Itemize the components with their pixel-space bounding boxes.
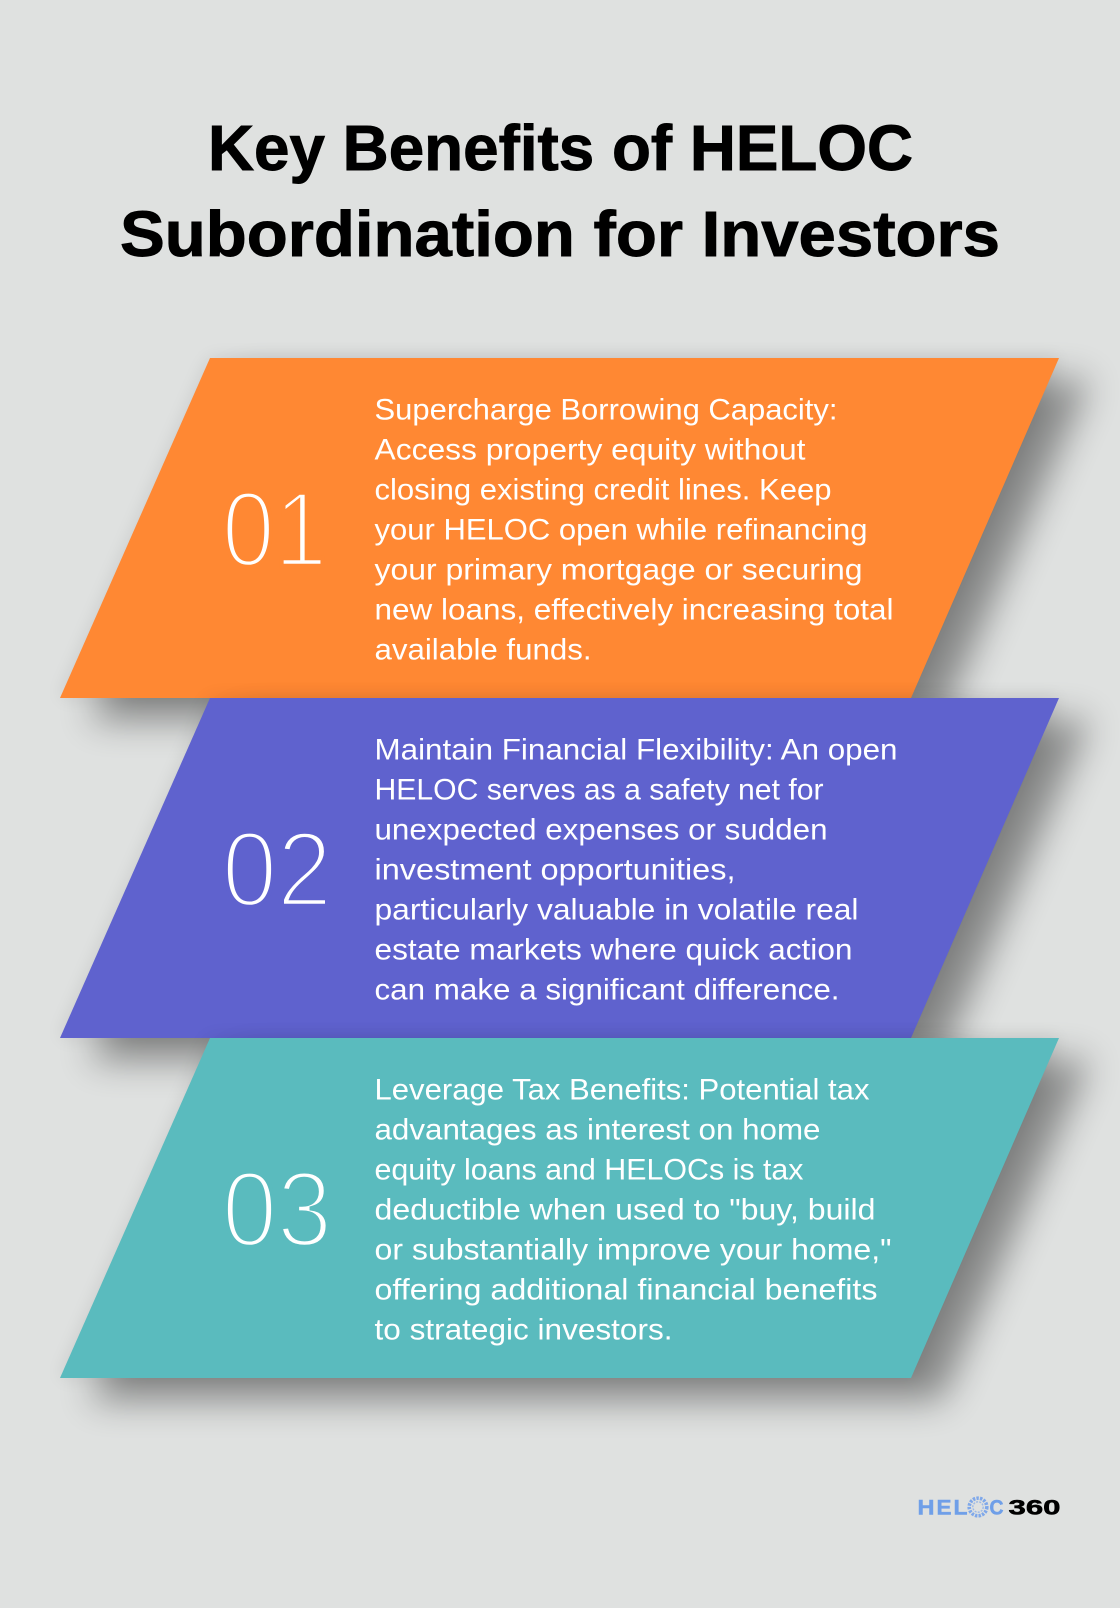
parallelogram: teal <box>60 1038 1059 1378</box>
text: tax benefits: offering additional financial benefits <box>374 1274 878 1306</box>
parallelogram: purple <box>60 698 1059 1038</box>
text: tax benefits: Leverage Tax Benefits: Potential tax <box>374 1074 870 1106</box>
text: tax benefits: deductible when used to "buy, build <box>374 1194 876 1226</box>
text: tax benefits: equity loans and HELOCs is tax <box>374 1154 804 1186</box>
logo: HELOC360: C <box>990 1496 1004 1520</box>
logo: HELOC360: H <box>918 1496 934 1520</box>
number 01: 01 <box>222 469 327 589</box>
text: borrowing capacity: your primary mortgage or securing <box>374 554 862 586</box>
text: tax benefits: to strategic investors. <box>374 1314 672 1346</box>
text: financial flexibility: unexpected expenses or sudden <box>374 814 828 846</box>
text: financial flexibility: particularly valuable in volatile real <box>374 894 858 926</box>
text: borrowing capacity <box>374 394 894 666</box>
title <box>120 112 1000 270</box>
text: borrowing capacity: available funds. <box>374 634 592 666</box>
panel: step 02 <box>60 698 1059 1038</box>
text: financial flexibility: can make a significant difference. <box>374 974 840 1006</box>
text: tax benefits <box>374 1074 892 1346</box>
text: financial flexibility: investment opportunities, <box>374 854 736 886</box>
text: borrowing capacity: Access property equity without <box>374 434 806 466</box>
parallelogram: orange <box>60 358 1059 698</box>
number 02: 02 <box>222 809 332 929</box>
text: financial flexibility: estate markets where quick action <box>374 934 852 966</box>
text: tax benefits: or substantially improve your home," <box>374 1234 892 1266</box>
number 03: 03 <box>222 1149 332 1269</box>
icon: swirl <box>969 1498 987 1516</box>
title: Subordination for Investors <box>120 198 1000 270</box>
text: borrowing capacity: new loans, effectively increasing total <box>374 594 894 626</box>
text: borrowing capacity: Supercharge Borrowing Capacity: <box>374 394 838 426</box>
text: borrowing capacity: closing existing credit lines. Keep <box>374 474 832 506</box>
logo: HELOC360: 360 <box>1008 1496 1060 1520</box>
text: financial flexibility: HELOC serves as a safety net for <box>374 774 824 806</box>
panel: step 03 <box>60 1038 1059 1378</box>
text: borrowing capacity: your HELOC open while refinancing <box>374 514 868 546</box>
panel: step 01 <box>60 358 1059 698</box>
logo: HELOC360 <box>918 1496 1060 1520</box>
text: financial flexibility: Maintain Financial Flexibility: An open <box>374 734 898 766</box>
title: Key Benefits of HELOC <box>208 112 913 184</box>
text: tax benefits: advantages as interest on home <box>374 1114 820 1146</box>
logo: HELOC360: E <box>936 1496 952 1520</box>
text: financial flexibility <box>374 734 898 1006</box>
logo: HELOC360: L <box>954 1496 968 1520</box>
